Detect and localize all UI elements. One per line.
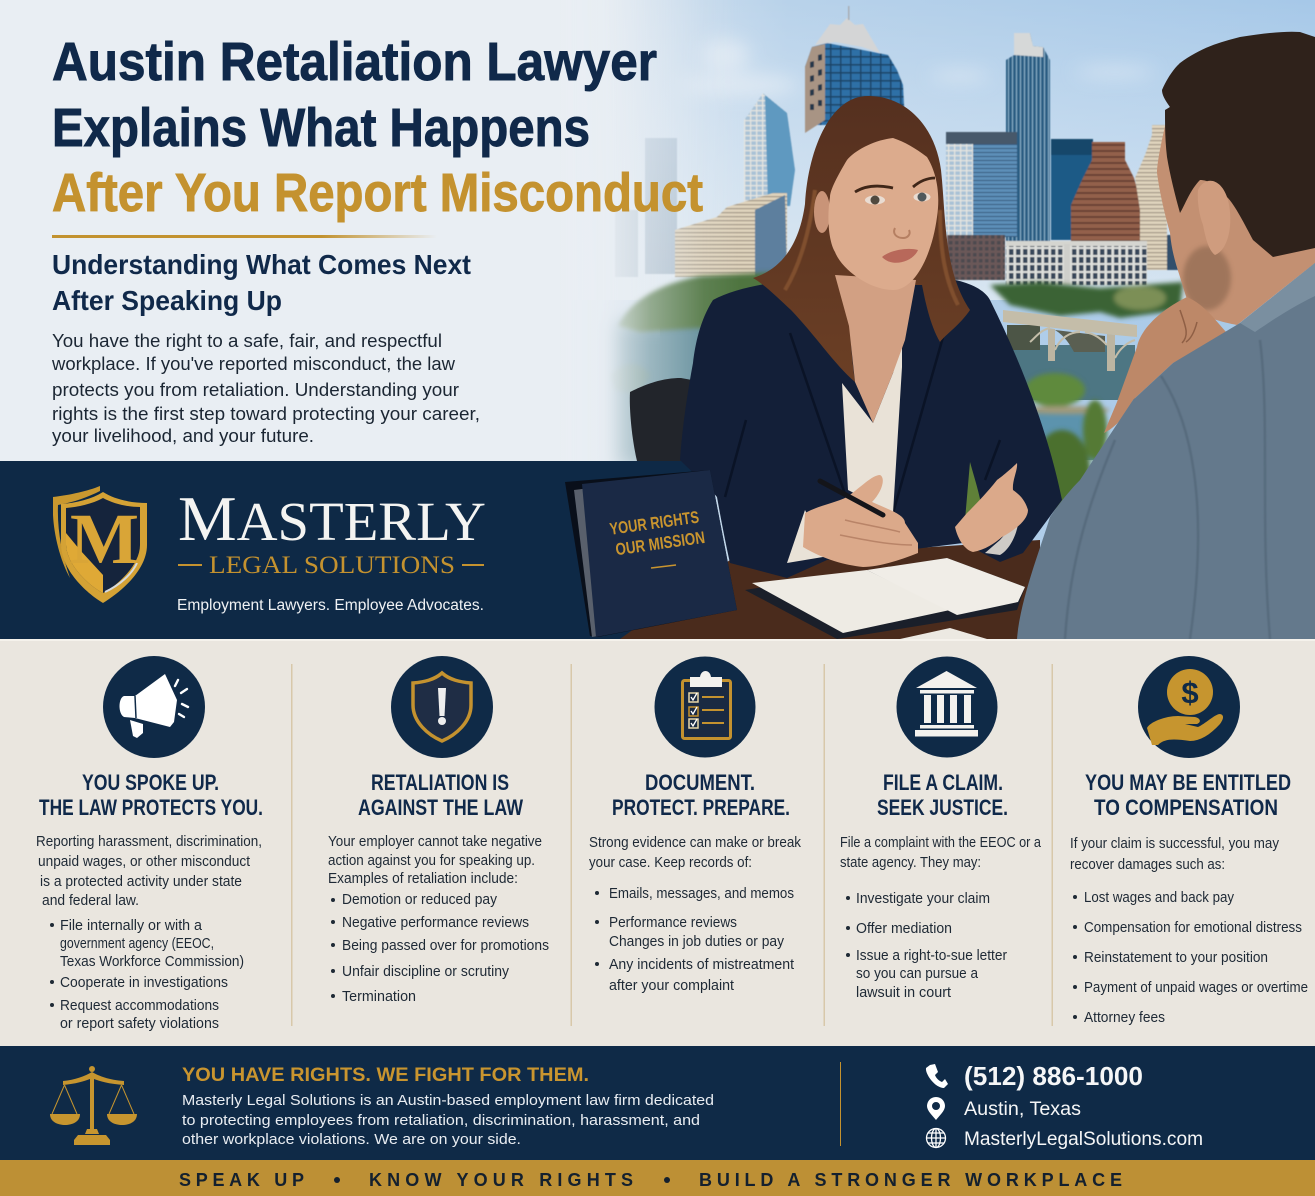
right hand	[955, 463, 1028, 552]
heading	[39, 770, 263, 820]
outer gold arc	[53, 486, 100, 578]
heading: THE LAW PROTECTS YOU.	[39, 795, 263, 820]
footer message: YOU HAVE RIGHTS. WE FIGHT FOR THEM.	[182, 1065, 589, 1086]
cream information panel	[0, 640, 1315, 1046]
heading: AGAINST THE LAW	[358, 795, 523, 820]
body text: Performance reviews	[609, 915, 737, 931]
location: Austin, Texas	[964, 1099, 1081, 1120]
subtitle: After Speaking Up	[52, 285, 282, 316]
blazer	[680, 280, 1062, 578]
body text: Cooperate in investigations	[60, 975, 228, 991]
gold lower left field	[66, 533, 103, 593]
gold rule	[52, 235, 437, 238]
logo wordmark: MASTERLY	[178, 483, 486, 554]
binder Your Rights Our Mission: OUR MISSION	[614, 528, 706, 559]
body text: Changes in job duties or pay	[609, 934, 785, 950]
hair	[1162, 32, 1315, 257]
body text	[1070, 836, 1308, 1026]
footer message: other workplace violations. We are on your side.	[182, 1131, 521, 1148]
body text: Examples of retaliation include:	[328, 871, 518, 887]
heading	[612, 770, 790, 820]
body text: is a protected activity under state	[40, 874, 242, 890]
shirt folds	[1065, 340, 1270, 639]
lapel shadows	[725, 333, 1000, 513]
heading: SEEK JUSTICE.	[877, 795, 1008, 820]
fist under chin	[1104, 297, 1227, 433]
body text	[840, 835, 1042, 1001]
logo shield: M	[70, 499, 139, 579]
icon: coin in hand	[1138, 656, 1240, 758]
heading: TO COMPENSATION	[1094, 795, 1278, 820]
body text: government agency (EEOC,	[60, 936, 214, 952]
footer message	[182, 1065, 714, 1148]
gold slogan bar	[0, 1160, 1315, 1196]
body text: action against you for speaking up.	[328, 853, 535, 869]
hero photo scene	[0, 0, 1315, 640]
binder Your Rights Our Mission	[565, 470, 737, 637]
body text: Negative performance reviews	[342, 915, 529, 931]
main title: Explains What Happens	[52, 98, 590, 158]
body text: unpaid wages, or other misconduct	[38, 854, 250, 870]
logo shield	[53, 486, 147, 603]
body text: Attorney fees	[1084, 1010, 1165, 1026]
intro paragraph: your livelihood, and your future.	[52, 425, 314, 446]
Austin skyline buildings	[615, 6, 1179, 285]
body text: recover damages such as:	[1070, 857, 1225, 873]
body text: lawsuit in court	[856, 985, 951, 1001]
heading	[877, 770, 1008, 820]
ear	[1198, 181, 1230, 255]
body text: Request accommodations	[60, 998, 219, 1014]
right cuff	[985, 526, 1018, 555]
body text: Compensation for emotional distress	[1084, 920, 1302, 936]
heading	[1085, 770, 1291, 820]
heading: RETALIATION IS	[371, 770, 509, 795]
body text: Reporting harassment, discrimination,	[36, 834, 262, 850]
subtitle	[52, 249, 471, 316]
neck	[835, 275, 916, 423]
body text: Offer mediation	[856, 921, 952, 937]
gold slogan bar: BUILD A STRONGER WORKPLACE	[699, 1170, 1122, 1190]
office chair	[630, 378, 692, 461]
ear	[814, 191, 830, 233]
intro paragraph: rights is the first step toward protecting your career,	[52, 403, 480, 424]
dark shield interior	[66, 498, 140, 593]
stone bridge	[1003, 310, 1137, 371]
heading: FILE A CLAIM.	[883, 770, 1003, 795]
heading	[358, 770, 523, 820]
intro paragraph	[51, 330, 480, 446]
column 3: document	[589, 656, 802, 994]
body text: File internally or with a	[60, 918, 203, 934]
body text: your case. Keep records of:	[589, 855, 752, 871]
icon: coin in hand: $	[1181, 675, 1199, 710]
finger lines	[840, 520, 912, 545]
river and water	[612, 322, 1135, 467]
main title	[52, 32, 703, 223]
left cuff	[787, 510, 823, 563]
blouse	[842, 340, 902, 513]
body text: File a complaint with the EEOC or a	[840, 835, 1042, 851]
open notebook	[745, 558, 1025, 639]
body text: Emails, messages, and memos	[609, 886, 794, 902]
gold shield outline	[61, 492, 147, 603]
icon: globe	[926, 1128, 946, 1148]
lawyer woman	[680, 96, 1062, 578]
intro paragraph: workplace. If you've reported misconduct, the law	[51, 353, 456, 374]
hair	[753, 96, 970, 382]
eyes and brows	[855, 178, 935, 204]
intro paragraph: protects you from retaliation. Understanding your	[52, 379, 459, 400]
trees along the shore	[610, 272, 1183, 510]
body text: Texas Workforce Commission)	[60, 954, 244, 970]
lips	[882, 249, 918, 263]
icon: courthouse	[896, 656, 998, 758]
wooden desk	[620, 540, 1040, 639]
icon: clipboard	[654, 656, 756, 758]
main title: Austin Retaliation Lawyer	[52, 32, 657, 92]
column 2: retaliation	[328, 656, 549, 1005]
pen	[820, 481, 883, 515]
face side and neck	[1157, 105, 1315, 325]
body text: Your employer cannot take negative	[328, 834, 542, 850]
body text: and federal law.	[42, 893, 139, 909]
footer navy band	[0, 1046, 1315, 1160]
heading: DOCUMENT.	[645, 770, 755, 795]
sky clouds	[680, 39, 1155, 95]
tree seen through arm gap	[966, 462, 980, 515]
body text: Investigate your claim	[856, 891, 990, 907]
client man seen from behind	[1017, 32, 1315, 639]
icon: phone	[926, 1064, 948, 1088]
icon: scales of justice	[50, 1066, 137, 1145]
body text: If your claim is successful, you may	[1070, 836, 1280, 852]
left hand	[803, 475, 918, 567]
body text: Termination	[342, 989, 416, 1005]
nose shadow	[894, 228, 910, 238]
silver arc	[105, 563, 137, 592]
shirt	[1017, 263, 1315, 639]
finger creases	[1180, 310, 1197, 343]
shirt collar	[1240, 263, 1315, 332]
hair highlights	[785, 190, 958, 305]
body text	[589, 835, 802, 994]
body text: so you can pursue a	[856, 966, 979, 982]
body text: Strong evidence can make or break	[589, 835, 802, 851]
subtitle: Understanding What Comes Next	[52, 249, 471, 280]
icon: warning shield	[391, 656, 493, 758]
footer message: Masterly Legal Solutions is an Austin-based employment law firm dedicated	[182, 1092, 714, 1109]
website: MasterlyLegalSolutions.com	[964, 1129, 1203, 1150]
gold slogan bar: SPEAK UP	[179, 1170, 304, 1190]
body text: Being passed over for promotions	[342, 938, 549, 954]
body text: Any incidents of mistreatment	[609, 957, 794, 973]
icon: location pin	[927, 1097, 945, 1120]
body text: Lost wages and back pay	[1084, 890, 1235, 906]
left fade into background	[397, 0, 560, 461]
body text: state agency. They may:	[840, 855, 981, 871]
navy logo band	[0, 461, 700, 639]
column 5: compensation	[1070, 656, 1308, 1026]
body text	[328, 834, 549, 1005]
phone number: (512) 886-1000	[964, 1061, 1143, 1091]
logo tagline: Employment Lawyers. Employee Advocates.	[177, 597, 484, 614]
gold slogan bar: KNOW YOUR RIGHTS	[369, 1170, 633, 1190]
body text: or report safety violations	[60, 1016, 219, 1032]
body text	[36, 834, 262, 1032]
face	[828, 138, 938, 290]
body text: Reinstatement to your position	[1084, 950, 1268, 966]
heading: YOU SPOKE UP.	[82, 770, 219, 795]
main title: After You Report Misconduct	[52, 163, 703, 223]
column 4: file a claim	[840, 656, 1042, 1001]
binder Your Rights Our Mission: YOUR RIGHTS	[608, 508, 700, 539]
icon: megaphone	[103, 656, 205, 758]
column 1: you spoke up	[36, 656, 263, 1032]
body text: after your complaint	[609, 978, 734, 994]
footer message: to protecting employees from retaliation, discrimination, harassment, and	[182, 1112, 700, 1129]
body text: Issue a right-to-sue letter	[856, 948, 1007, 964]
beard stubble	[1183, 246, 1231, 310]
intro paragraph: You have the right to a safe, fair, and respectful	[52, 330, 442, 351]
body text: Unfair discipline or scrutiny	[342, 964, 510, 980]
logo wordmark: LEGAL SOLUTIONS	[209, 552, 455, 579]
heading: PROTECT. PREPARE.	[612, 795, 790, 820]
body text: Demotion or reduced pay	[342, 892, 498, 908]
